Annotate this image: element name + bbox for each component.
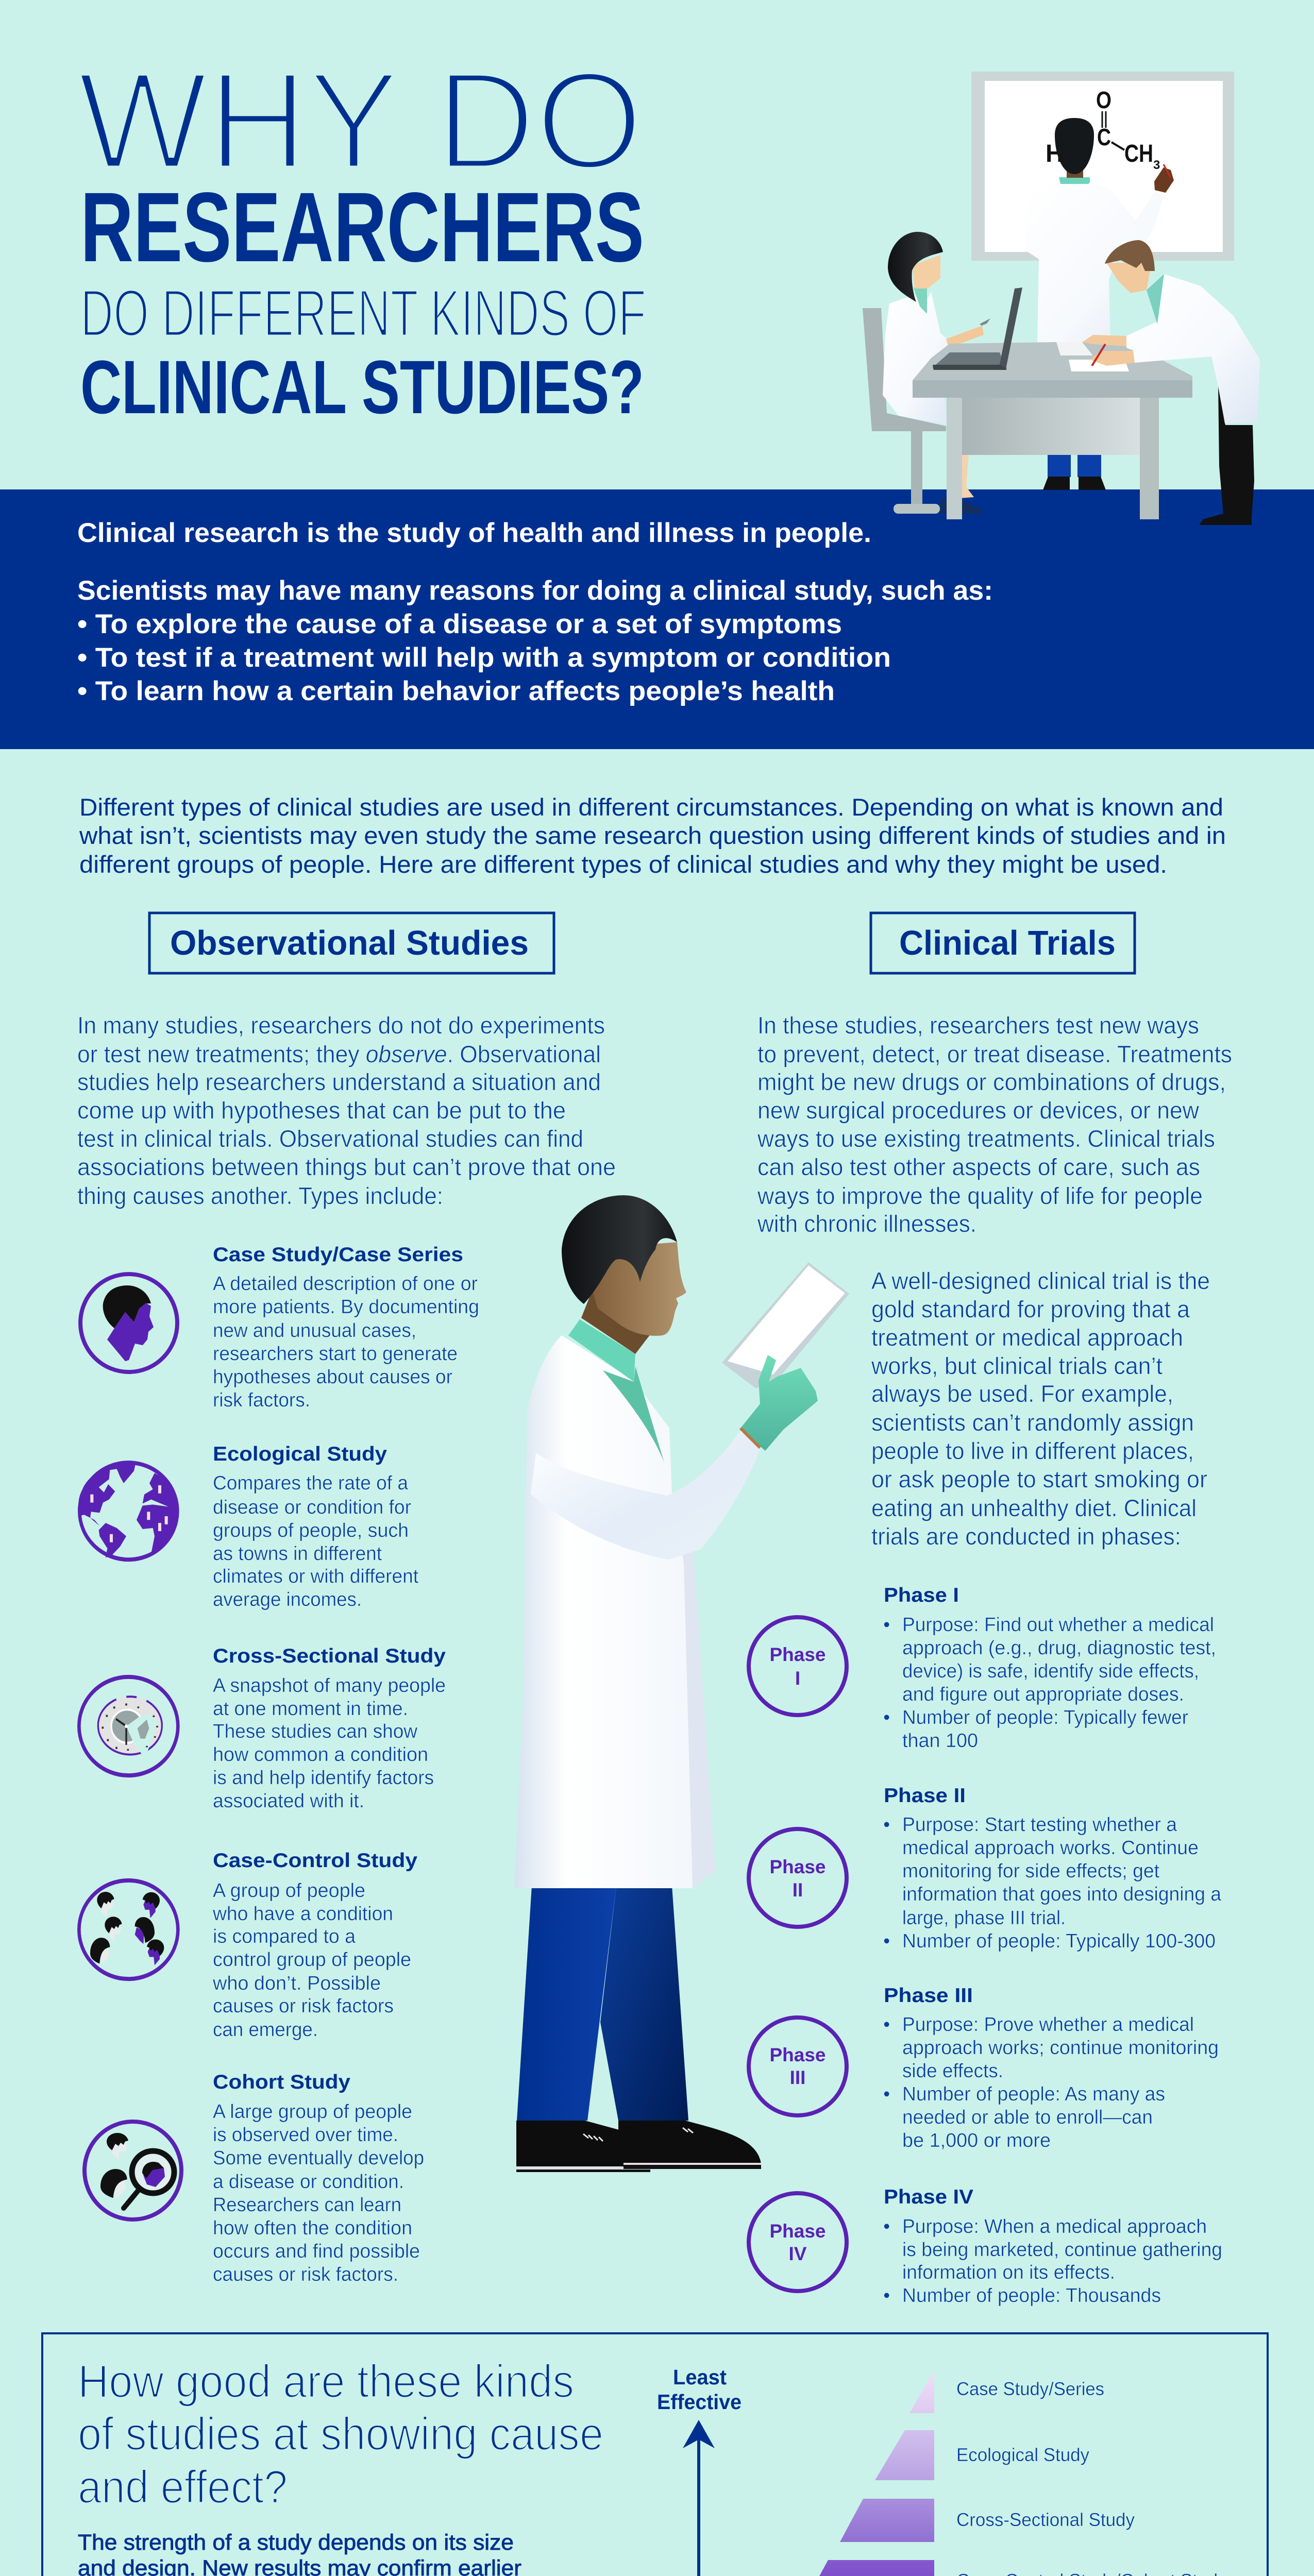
description: is and help identify factors [213, 1767, 434, 1789]
text block: clinical trials description: new surgical procedures or devices, or new [757, 1097, 1200, 1124]
description: occurs and find possible [213, 2241, 420, 2262]
text block: clinical trials description: with chronic illnesses. [757, 1210, 976, 1237]
text block: observational studies description: thing causes another. Types include: [77, 1182, 443, 1209]
description: Some eventually develop [213, 2147, 424, 2169]
title line: WHY DO: WHY DO [77, 43, 643, 198]
heading: Cohort Study [213, 2071, 350, 2093]
title line: RESEARCHERS: RESEARCHERS [80, 172, 644, 282]
band reasons list: • To learn how a certain behavior affects people’s health [77, 676, 835, 706]
description: who have a condition [212, 1903, 393, 1925]
icon: Phase IV badge: Phase [769, 2221, 826, 2242]
raised arm [531, 1430, 760, 1560]
seated researcher and chair [863, 232, 990, 514]
heading: Clinical Trials [871, 913, 1135, 973]
icon: Phase II badge: Phase [769, 1856, 826, 1877]
bullets: Purpose: Start testing whether a [902, 1814, 1177, 1836]
label: Least Effective: Least [673, 2365, 727, 2389]
panel: cause and effect [42, 2333, 1268, 2576]
bullets: Purpose: When a medical approach [902, 2216, 1207, 2238]
heading: Phase II [884, 1785, 966, 1807]
bullets: than 100 [902, 1730, 978, 1752]
band reasons list: Scientists may have many reasons for doing a clinical study, such as: [77, 575, 993, 606]
whiteboard with molecule: 3 [1153, 158, 1160, 172]
description: control group of people [213, 1949, 411, 1971]
band reasons list: • To test if a treatment will help with a symptom or condition [77, 642, 891, 673]
phase item: Phase II [749, 1785, 1222, 1952]
description: Compares the rate of a [213, 1472, 409, 1494]
icon: Phase I badge [749, 1617, 847, 1715]
table with laptop and papers [913, 287, 1192, 519]
description: A group of people [213, 1880, 365, 1902]
text block: gold standard: works, but clinical trials can’t [871, 1352, 1163, 1379]
whiteboard with molecule: C [1097, 124, 1111, 150]
intro paragraph: Different types of clinical studies are used in different circumstances. Depending on what is known and [79, 793, 1223, 821]
description: disease or condition for [213, 1497, 411, 1518]
intro paragraph [79, 793, 1226, 878]
text block: clinical trials description [757, 1012, 1232, 1237]
text block: clinical trials description: to prevent, detect, or treat disease. Treatments [757, 1041, 1232, 1067]
text block: gold standard: eating an unhealthy diet. Clinical [871, 1495, 1197, 1521]
description: a disease or condition. [213, 2171, 404, 2193]
title line: DO DIFFERENT KINDS OF: DO DIFFERENT KINDS OF [80, 276, 646, 350]
icon: magnifying glass on heads [85, 2122, 181, 2219]
bullets: is being marketed, continue gathering [902, 2239, 1222, 2261]
description [213, 1472, 418, 1611]
description: A large group of people [213, 2101, 412, 2123]
bullets: information on its effects. [902, 2262, 1115, 2283]
description: as towns in different [213, 1543, 382, 1565]
icon: Phase III badge: III [790, 2067, 805, 2088]
wrist [740, 1428, 760, 1448]
bullets: Purpose: Find out whether a medical [902, 1614, 1214, 1636]
bullets [883, 1614, 1216, 1752]
text block: clinical trials description: In these studies, researchers test new ways [757, 1012, 1199, 1039]
bullets: • [883, 2285, 890, 2307]
title [77, 43, 646, 430]
tablet [722, 1262, 849, 1388]
pyramid labels: Ecological Study [956, 2444, 1089, 2465]
shoes [516, 2121, 761, 2172]
description: groups of people, such [213, 1520, 409, 1541]
study item: Ecological Study [78, 1443, 418, 1611]
band lead sentence: Clinical research is the study of health and illness in people. [77, 518, 871, 548]
lab coat [514, 1335, 693, 1888]
whiteboard with molecule: O [1096, 87, 1111, 113]
text block: gold standard: or ask people to start smoking or [871, 1466, 1207, 1493]
text block: clinical trials description: ways to improve the quality of life for people [757, 1182, 1203, 1209]
bullets: • [883, 2014, 890, 2036]
panel: intro blue band [0, 489, 1314, 749]
heading: Case Study/Case Series [213, 1244, 463, 1266]
intro paragraph: what isn’t, scientists may even study the same research question using different kinds of studies and in [79, 822, 1226, 849]
bullets: monitoring for side effects; get [902, 1860, 1159, 1882]
neck [581, 1283, 650, 1354]
panel heading: How good are these kinds [78, 2356, 574, 2408]
title line: CLINICAL STUDIES?: CLINICAL STUDIES? [80, 345, 644, 430]
bullets: be 1,000 or more [902, 2130, 1051, 2151]
description: hypotheses about causes or [213, 1366, 452, 1388]
heading: Phase III [884, 1985, 973, 2007]
study item: Case-Control Study [79, 1850, 417, 2041]
bullets: medical approach works. Continue [902, 1837, 1199, 1859]
description: can emerge. [213, 2019, 318, 2041]
bullets: information that goes into designing a [902, 1884, 1222, 1905]
bullets: large, phase III trial. [902, 1907, 1066, 1929]
description: more patients. By documenting [213, 1296, 479, 1318]
description: causes or risk factors. [213, 2264, 398, 2285]
text block: gold standard [871, 1267, 1210, 1550]
icon: Phase III badge [749, 2018, 847, 2115]
bullets [883, 1814, 1222, 1952]
illustration: doctor with tablet [514, 1195, 849, 2172]
arrow: double-headed effectiveness [683, 2420, 715, 2576]
icon: Phase I badge: I [795, 1668, 800, 1689]
text block: observational studies description [77, 1012, 616, 1209]
panel body text: The strength of a study depends on its size [78, 2530, 514, 2555]
description: associated with it. [213, 1790, 364, 1812]
text block: observational studies description: or test new treatments; they observe. Observational [77, 1041, 601, 1067]
description: Researchers can learn [213, 2194, 401, 2216]
icon: Phase IV badge [749, 2193, 847, 2291]
icon: Phase II badge: II [793, 1879, 803, 1901]
bullets: side effects. [902, 2060, 1003, 2082]
bullets: Number of people: Typically fewer [902, 1707, 1188, 1728]
study item: Cohort Study [85, 2071, 424, 2285]
description: A detailed description of one or [213, 1273, 478, 1295]
whiteboard with molecule [971, 72, 1234, 261]
description: new and unusual cases, [213, 1320, 416, 1342]
illustration: researchers at table [863, 72, 1260, 525]
phase item: Phase I [749, 1584, 1216, 1752]
coat shadow tail [670, 1546, 715, 1888]
study item: Cross-Sectional Study [79, 1645, 446, 1812]
shirt [603, 1366, 664, 1463]
label: Least Effective [657, 2365, 742, 2414]
whiteboard with molecule: CH [1124, 140, 1153, 167]
bullets [883, 2216, 1222, 2307]
text block: gold standard: gold standard for proving that a [871, 1296, 1190, 1323]
heading: Case-Control Study [213, 1850, 417, 1872]
chart: effectiveness pyramid [766, 2370, 934, 2576]
description [213, 1273, 479, 1411]
bullets: approach works; continue monitoring [902, 2037, 1219, 2059]
bending researcher [1082, 240, 1260, 525]
description: A snapshot of many people [213, 1675, 446, 1697]
text block: observational studies description: In many studies, researchers do not do experiments [77, 1012, 605, 1039]
study item: Case Study/Case Series [80, 1244, 479, 1411]
description: causes or risk factors [213, 1995, 394, 2017]
description: risk factors. [213, 1389, 310, 1411]
pyramid labels: Cross-Sectional Study [956, 2509, 1135, 2530]
whiteboard with molecule: H [1046, 140, 1064, 167]
phase item: Phase III [749, 1985, 1219, 2151]
text block: gold standard: people to live in different places, [871, 1437, 1194, 1464]
band reasons list [77, 575, 993, 706]
text block: gold standard: always be used. For example, [871, 1380, 1173, 1407]
description: average incomes. [213, 1589, 362, 1611]
text block: clinical trials description: can also test other aspects of care, such as [757, 1154, 1200, 1180]
bullets: • [883, 1614, 890, 1636]
bullets: Purpose: Prove whether a medical [902, 2014, 1194, 2036]
bullets: • [883, 2083, 890, 2105]
bullets: device) is safe, identify side effects, [902, 1660, 1199, 1682]
description: researchers start to generate [213, 1343, 458, 1365]
panel heading: and effect? [78, 2462, 288, 2513]
bullets: • [883, 2216, 890, 2238]
pyramid labels [956, 2378, 1227, 2576]
bullets: Number of people: Typically 100-300 [902, 1930, 1216, 1952]
heading: Ecological Study [213, 1443, 387, 1465]
heading: Observational Studies [149, 913, 554, 973]
text block: clinical trials description: ways to use existing treatments. Clinical trials [757, 1125, 1215, 1152]
label: Least Effective: Effective [657, 2390, 742, 2414]
band reasons list: • To explore the cause of a disease or a set of symptoms [77, 609, 842, 639]
text block: gold standard: treatment or medical approach [871, 1324, 1183, 1351]
description: who don’t. Possible [212, 1973, 381, 1994]
description [213, 1675, 446, 1812]
description: at one moment in time. [213, 1698, 408, 1720]
bullets: approach (e.g., drug, diagnostic test, [902, 1637, 1216, 1659]
icon: head profile [80, 1274, 177, 1372]
icon: Phase IV badge: IV [789, 2243, 807, 2264]
face [587, 1242, 686, 1336]
panel heading [78, 2356, 603, 2513]
icon: group of heads [79, 1880, 178, 1979]
heading: Cross-Sectional Study [213, 1645, 446, 1667]
trousers [517, 1886, 688, 2121]
icon: Phase II badge [749, 1829, 847, 1927]
icon: Phase I badge: Phase [769, 1644, 826, 1665]
panel body text [78, 2530, 551, 2576]
bullets: Number of people: Thousands [902, 2285, 1161, 2307]
heading: Observational Studies: Observational Studies [170, 924, 529, 962]
bullets: Number of people: As many as [902, 2083, 1165, 2105]
icon: globe [78, 1463, 179, 1560]
description: is observed over time. [213, 2124, 398, 2146]
panel heading: of studies at showing cause [78, 2409, 603, 2460]
text block: observational studies description: test in clinical trials. Observational studies can find [77, 1125, 583, 1152]
description: climates or with different [213, 1566, 418, 1587]
hair [562, 1195, 677, 1304]
bullets: needed or able to enroll—can [902, 2107, 1153, 2128]
text block: clinical trials description: might be new drugs or combinations of drugs, [757, 1069, 1226, 1095]
icon: clock [79, 1677, 178, 1775]
description: is compared to a [213, 1926, 356, 1947]
glove [740, 1355, 818, 1451]
description: how often the condition [213, 2217, 412, 2239]
text block: gold standard: scientists can’t randomly assign [871, 1409, 1194, 1436]
collar [568, 1319, 635, 1382]
text block: gold standard: A well-designed clinical trial is the [871, 1267, 1210, 1294]
pyramid labels: Case Study/Series [956, 2378, 1104, 2399]
description [213, 2101, 424, 2285]
heading: Phase IV [884, 2186, 973, 2208]
icon: Phase III badge: Phase [769, 2044, 826, 2065]
description: how common a condition [213, 1744, 428, 1766]
text block: observational studies description: associations between things but can’t prove that one [77, 1154, 616, 1180]
bullets: and figure out appropriate doses. [902, 1684, 1184, 1705]
text block: gold standard: trials are conducted in phases: [871, 1523, 1181, 1550]
text block: observational studies description: come up with hypotheses that can be put to the [77, 1097, 566, 1124]
heading: Phase I [884, 1584, 959, 1606]
description [212, 1880, 411, 2041]
bullets: • [883, 1930, 890, 1952]
bullets [883, 2014, 1219, 2151]
standing researcher [1025, 118, 1174, 490]
phase item: Phase IV [749, 2186, 1222, 2307]
heading: Clinical Trials: Clinical Trials [899, 924, 1116, 962]
bullets: • [883, 1707, 890, 1728]
text block: observational studies description: studies help researchers understand a situation and [77, 1069, 601, 1095]
description: These studies can show [213, 1721, 418, 1742]
bullets: • [883, 1814, 890, 1836]
intro paragraph: different groups of people. Here are different types of clinical studies and why they might be used. [79, 851, 1167, 878]
